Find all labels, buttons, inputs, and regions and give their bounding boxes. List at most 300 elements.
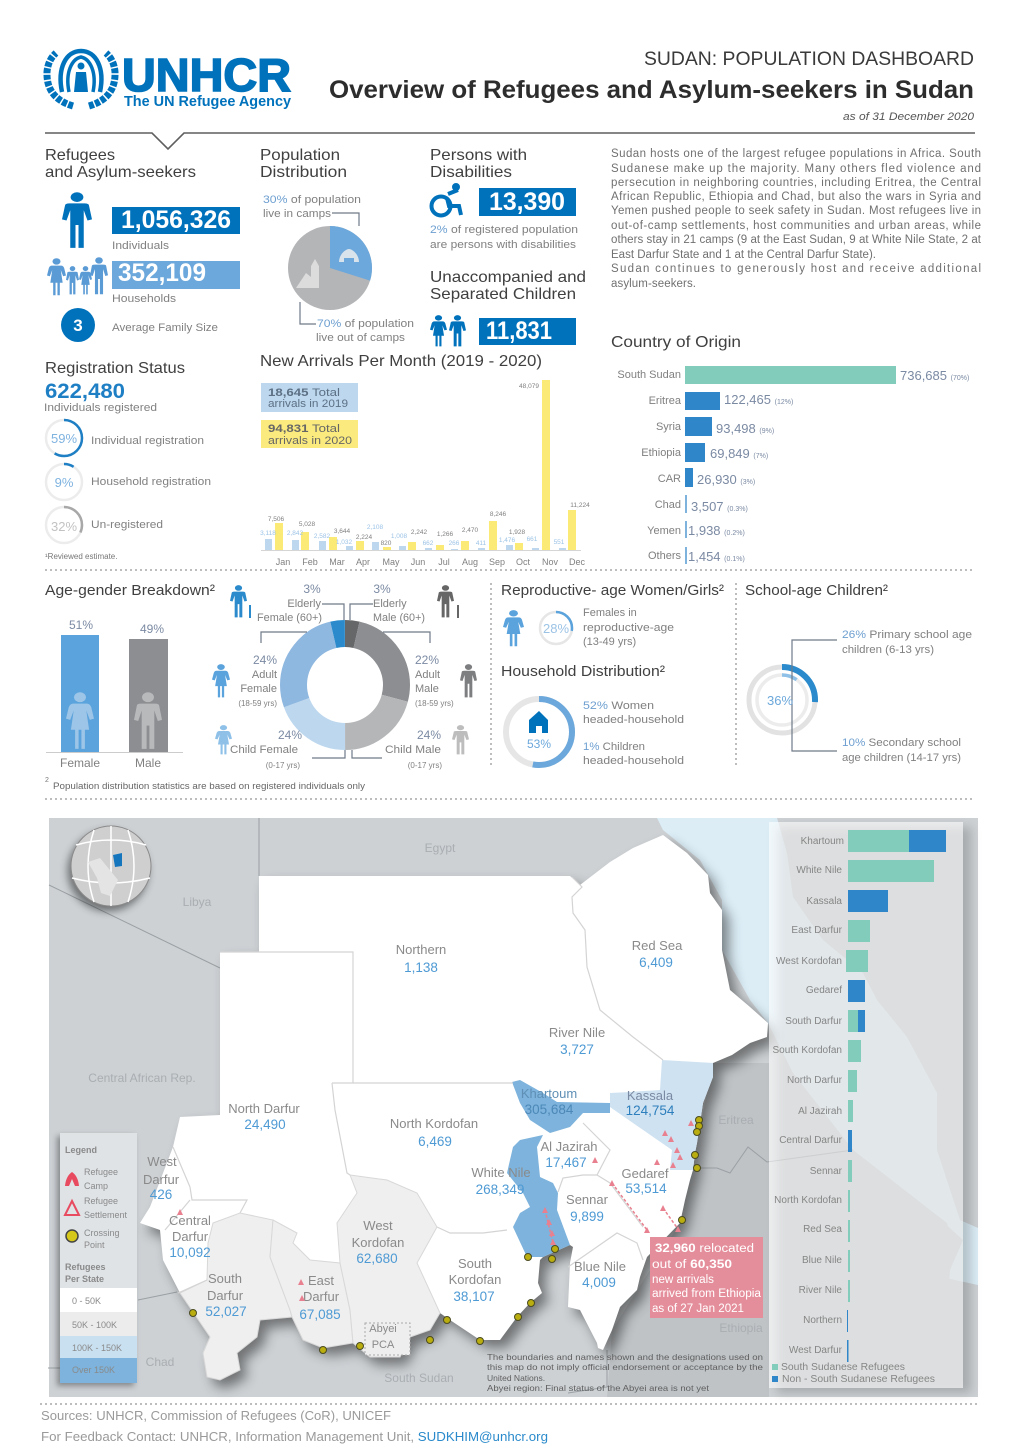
label: females in reproductive age: reproductive-age: [583, 622, 674, 634]
state labels: 62,680: [356, 1251, 398, 1266]
state labels: 6,469: [418, 1134, 452, 1149]
state labels: West: [147, 1154, 177, 1169]
legend item: crossing point: Crossing: [84, 1228, 120, 1238]
Sudan outline: [140, 835, 768, 1380]
callout: relocated new arrivals: [650, 1237, 763, 1318]
country labels: Central African Rep.: [88, 1071, 196, 1085]
state labels: South: [208, 1271, 242, 1286]
label: elderly male: Elderly: [373, 598, 407, 610]
state: White Nile: [507, 1135, 570, 1257]
heading: School-age Children²: [745, 582, 888, 599]
value labels: 2019: 661: [527, 536, 538, 543]
axis labels: months: Mar: [329, 557, 345, 567]
bar: South Sudan: South Sudan: [617, 369, 681, 381]
stat: individuals registered: [44, 380, 157, 414]
bar: Ethiopia: Ethiopia: [641, 447, 682, 459]
text block: overview paragraph: Yemen pushed people to seek safety in Sudan. Most refugees live in: [611, 205, 981, 217]
label: adult female: [212, 653, 277, 708]
panel: population distribution: [260, 147, 414, 344]
gauge: 28%: 28%: [543, 621, 569, 636]
chart legend: Non - South Sudanese Refugees: [782, 1374, 935, 1385]
bar: Syria: [656, 417, 774, 436]
bars: South Sudanese refugees: [846, 830, 934, 1302]
state labels: 17,467: [545, 1155, 587, 1170]
state labels: 305,684: [525, 1102, 574, 1117]
value labels: 2020: 5,028: [299, 521, 316, 528]
value labels: 2019: 551: [554, 539, 565, 546]
label: in camps: 30% of population: [263, 194, 354, 206]
stat: average family size: Average Family Size: [112, 322, 218, 334]
text block: overview paragraph: Sudan continues to generously host and receive additional: [611, 263, 981, 275]
state labels: 268,349: [476, 1182, 524, 1197]
label: elderly female: 3%: [303, 582, 321, 596]
sea: [657, 818, 978, 1397]
bar: male: [129, 622, 168, 770]
stat: average family size: [61, 308, 218, 342]
bar: South Sudan: [617, 366, 969, 384]
label: adult female: (18-59 yrs): [238, 699, 277, 708]
axis labels: months: Aug: [462, 557, 478, 567]
label: child male: 24%: [417, 728, 441, 742]
callout: 2019 total: 18,645 Total: [268, 387, 340, 399]
footnote: 2: [45, 777, 49, 784]
stat: households: 352,109: [118, 259, 206, 287]
gauge: individual registration: [46, 420, 204, 456]
text block: overview paragraph: asylum-seekers.: [611, 278, 696, 290]
bar labels: states: Khartoum: [801, 836, 844, 847]
footnote: Population distribution statistics are based on registered individuals only: [53, 781, 366, 791]
bar: Ethiopia: [641, 443, 768, 462]
axis labels: months: Jan: [276, 557, 290, 567]
state labels: Khartoum: [521, 1086, 577, 1101]
panel: refugees and asylum-seekers: [45, 147, 240, 342]
value labels: 2019: 266: [449, 540, 460, 547]
state labels: Red Sea: [632, 938, 683, 953]
state labels: Kassala: [627, 1088, 674, 1103]
bar: Ethiopia: 69,849 (7%): [710, 446, 768, 461]
label: adult male: (18-59 yrs): [415, 699, 454, 708]
gauge: household registration: 9%: [55, 475, 74, 490]
text block: overview paragraph: African Republic, Ethiopia and Chad, but also the wars in Syria and: [611, 191, 981, 203]
stat: individuals registered: Individuals registered: [44, 402, 157, 414]
title block: [329, 49, 975, 123]
state labels: [143, 938, 683, 1351]
donut chart: [294, 634, 396, 736]
label: adult female: 24%: [253, 653, 277, 667]
value labels: 2020: 1,928: [509, 529, 526, 536]
stat: average family size: 3: [73, 316, 83, 335]
icon: UNHCR emblem: [47, 51, 115, 106]
heading: Registration Status: [45, 360, 185, 377]
label: child female: (0-17 yrs): [266, 761, 300, 770]
icon: house: [529, 711, 548, 733]
state labels: 4,009: [582, 1275, 616, 1290]
bar labels: states: River Nile: [799, 1285, 842, 1296]
country labels: South Sudan: [384, 1371, 454, 1385]
crossing points: [190, 1116, 702, 1354]
legend item: crossing point: Point: [84, 1240, 105, 1250]
text block: overview paragraph: others stay in 21 camps (9 at the East Sudan, 9 at White Nile State, 2 at: [611, 234, 982, 246]
callout: relocated new arrivals: as of 27 Jan 2021: [652, 1303, 744, 1315]
state labels: 24,490: [244, 1117, 286, 1132]
legend swatch: 100K - 150K: 100K - 150K: [72, 1343, 122, 1353]
value labels: 2019: 1,476: [499, 537, 516, 544]
bar labels: states: Red Sea: [803, 1224, 842, 1235]
legend item: refugee camp: Refugee: [84, 1167, 118, 1177]
bar: Syria: 93,498 (9%): [716, 421, 774, 436]
state labels: 38,107: [453, 1289, 495, 1304]
state labels: Al Jazirah: [540, 1139, 598, 1154]
chart: new arrivals per month: [260, 353, 590, 567]
state labels: Sennar: [566, 1192, 609, 1207]
axis labels: months: Feb: [302, 557, 318, 567]
value labels: 2019: 2,842: [287, 530, 304, 537]
bar: Syria: Syria: [656, 421, 682, 433]
state: South Darfur: [180, 1213, 292, 1380]
value labels: 2020: 1,266: [437, 531, 454, 538]
heading: Age-gender Breakdown²: [45, 582, 215, 599]
bar labels: states: South Kordofan: [772, 1045, 842, 1056]
state labels: East: [308, 1273, 334, 1288]
icon: children: [430, 315, 466, 346]
legend heading: refugees per state: Per State: [65, 1274, 104, 1284]
gauge: school-age: 36%: [767, 693, 793, 708]
country labels: Egypt: [425, 841, 456, 855]
pie chart: [288, 226, 372, 310]
value labels: 2020: 2,224: [356, 534, 373, 541]
state borders: [165, 877, 663, 1293]
label: elderly male: [373, 582, 458, 624]
callout: 2020 total: [261, 420, 358, 448]
axis labels: months: Nov: [542, 557, 558, 567]
state labels: PCA: [372, 1339, 395, 1351]
bar: Others: [648, 547, 745, 564]
stat: 11,831: 11,831: [486, 317, 552, 345]
state labels: Blue Nile: [574, 1259, 626, 1274]
gauge: household registration: Household registration: [91, 476, 211, 488]
state: West Kordofan: [337, 1175, 440, 1357]
bar: female: Female: [60, 756, 100, 770]
heading: Country of Origin: [611, 334, 741, 351]
stat: individuals: [112, 206, 240, 252]
value labels: 2020: 3,644: [334, 528, 351, 535]
state labels: 53,514: [625, 1181, 667, 1196]
value labels: 2019: 411: [476, 540, 487, 547]
panel: persons with disabilities: [430, 147, 578, 251]
axis labels: months: Apr: [356, 557, 370, 567]
chart legend: [772, 1362, 935, 1385]
bar labels: states: West Darfur: [789, 1345, 843, 1356]
feedback contact: For Feedback Contact: UNHCR, Information Management Unit, SUDKHIM@unhcr.org: [41, 1429, 548, 1444]
gauge: school-age: [749, 640, 837, 751]
legend: [60, 1133, 137, 1383]
callout: relocated new arrivals: new arrivals: [652, 1274, 714, 1286]
country labels: Chad: [146, 1355, 174, 1369]
bar labels: states: North Kordofan: [774, 1195, 842, 1206]
surrounding land: Eritrea and Ethiopia, west of panel edge: [607, 1063, 769, 1397]
legend swatch: 0 - 50K: 0 - 50K: [72, 1296, 101, 1306]
callout: 2019 total: [261, 383, 358, 412]
state: East Darfur: [270, 1220, 353, 1348]
panel: unaccompanied and separated children: [430, 269, 586, 346]
label: child female: [215, 725, 302, 770]
callout: 2020 total: arrivals in 2020: [268, 435, 352, 447]
bar labels: states: Blue Nile: [802, 1255, 842, 1266]
callout: relocated new arrivals: 32,960 relocated: [655, 1243, 746, 1255]
heading: Population: [260, 147, 340, 164]
bar labels: states: East Darfur: [791, 925, 843, 936]
sources and contact: [41, 1408, 548, 1444]
panel: refugees per state bar chart: [769, 822, 963, 1388]
heading: Unaccompanied and: [430, 269, 586, 286]
bar: CAR: [658, 468, 755, 487]
surrounding land: Eritrea and Ethiopia, east of panel edge: [769, 1063, 978, 1397]
bar: Chad: 3,507 (0.3%): [691, 499, 748, 514]
state labels: Darfur: [303, 1289, 340, 1304]
panel: age-gender breakdown: [45, 582, 477, 791]
bar labels: states: Sennar: [810, 1166, 843, 1177]
label: child female: Child Female: [230, 744, 298, 756]
gauge: 28%: [540, 612, 572, 644]
supertitle: SUDAN: POPULATION DASHBOARD: [644, 49, 974, 70]
value labels: 2020: 7,506: [268, 516, 285, 523]
bar: CAR: 26,930 (3%): [697, 472, 755, 487]
stat: households: [112, 259, 240, 305]
bar: South Sudan: 736,685 (70%): [900, 368, 969, 383]
state labels: Central: [169, 1213, 211, 1228]
bar: Chad: [655, 495, 748, 514]
icon: wheelchair: [432, 185, 461, 216]
state labels: 1,138: [404, 960, 438, 975]
callout: 2019 total: arrivals in 2019: [268, 398, 348, 410]
sources: Sources: UNHCR, Commission of Refugees (CoR), UNICEF: [41, 1408, 391, 1423]
bar: Chad: Chad: [655, 499, 681, 511]
label: adult male: [415, 653, 477, 708]
disclaimer: Abyei region: Final status of the Abyei area is not yet: [487, 1383, 710, 1393]
value labels: 2020: 48,079: [519, 383, 539, 390]
wordmark: UNHCR: UNHCR: [122, 49, 291, 101]
main title: Overview of Refugees and Asylum-seekers in Sudan: [329, 76, 974, 104]
state labels: North Kordofan: [390, 1116, 478, 1131]
label: females in reproductive age: (13-49 yrs): [583, 636, 636, 648]
state labels: 3,727: [560, 1042, 594, 1057]
heading: Separated Children: [430, 286, 576, 303]
heading: Persons with: [430, 147, 527, 164]
text block: overview paragraph: Sudanese make up the majority. Many others fled violence and: [611, 163, 981, 175]
value labels: 2019: 662: [423, 540, 434, 547]
heading: New Arrivals Per Month (2019 - 2020): [260, 353, 542, 370]
bar labels: states: West Kordofan: [776, 956, 842, 967]
label: adult male: 22%: [415, 653, 439, 667]
gauge: un-registered: 32%: [51, 519, 77, 534]
bar: female: 51%: [69, 618, 93, 632]
panel: school-age children: [745, 582, 972, 764]
state labels: River Nile: [549, 1025, 605, 1040]
bar labels: states: Kassala: [806, 896, 842, 907]
chart: country of origin: [611, 334, 969, 564]
heading: Disabilities: [430, 164, 512, 181]
label: child male: Child Male: [385, 744, 441, 756]
country labels: Libya: [183, 895, 212, 909]
map background: [49, 818, 978, 1397]
gauge: individual registration: 59%: [51, 431, 77, 446]
disclaimer: United Nations.: [487, 1373, 545, 1383]
panel: household distribution: [501, 663, 684, 767]
bar: Others: Others: [648, 550, 681, 562]
stat: households: Households: [112, 293, 177, 305]
label: adult female: Adult: [252, 669, 277, 681]
bar: Yemen: Yemen: [647, 525, 681, 537]
axis labels: months: Jun: [411, 557, 425, 567]
icon: family: [47, 257, 108, 295]
state labels: Gedaref: [622, 1166, 669, 1181]
state labels: Darfur: [207, 1288, 244, 1303]
heading: Distribution: [260, 164, 347, 181]
legend heading: Legend: [65, 1145, 97, 1155]
bars: Non-South Sudanese refugees: [847, 830, 946, 1362]
bar: female: [60, 618, 100, 770]
bar: Yemen: [647, 521, 745, 538]
country labels: Eritrea: [718, 1113, 754, 1127]
label: primary: children (6-13 yrs): [842, 644, 934, 656]
label: adult male: Adult: [415, 669, 440, 681]
state labels: 67,085: [299, 1307, 341, 1322]
label: elderly female: Elderly: [287, 598, 321, 610]
heading: Reproductive- age Women/Girls²: [501, 582, 724, 599]
label: in camps: live in camps: [263, 208, 332, 220]
bar: Eritrea: [649, 392, 793, 410]
legend item: refugee settlement: [65, 1196, 128, 1220]
axis labels: months: Oct: [516, 557, 530, 567]
label: elderly male: 3%: [373, 582, 391, 596]
label: women-headed: 52% Women: [583, 700, 649, 712]
label: elderly male: Male (60+): [373, 612, 425, 624]
text block: overview paragraph: East Darfur State and 1 at the Central Darfur State).: [611, 249, 876, 261]
value labels: 2020: 2,242: [411, 529, 428, 536]
value labels: 2019: 2,108: [367, 524, 384, 531]
bar: CAR: CAR: [658, 473, 681, 485]
state labels: West: [363, 1218, 393, 1233]
relocation routes: [545, 1183, 678, 1243]
legend heading: refugees per state: Refugees: [65, 1262, 106, 1272]
label: adult female: Female: [240, 683, 277, 695]
stat: 13,390: 13,390: [489, 188, 565, 216]
gauge: household registration: [46, 464, 211, 500]
legend swatch: 50K - 100K: [60, 1312, 137, 1336]
heading: Refugees: [45, 147, 115, 164]
label: child female: 24%: [278, 728, 302, 742]
callout: relocated new arrivals: arrived from Ethiopia: [652, 1288, 762, 1300]
bar: Eritrea: Eritrea: [649, 395, 682, 407]
text block: overview paragraph: persecution in neighboring countries, including Eritrea, the Central: [611, 177, 981, 189]
axis labels: months: Dec: [569, 557, 585, 567]
bar labels: states: Central Darfur: [779, 1135, 843, 1146]
label: disabilities share: are persons with disabilities: [430, 239, 577, 251]
bar: Others: 1,454 (0.1%): [688, 549, 745, 564]
heading: and Asylum-seekers: [45, 164, 196, 181]
legend item: refugee settlement: Refugee: [84, 1196, 118, 1206]
axis labels: months: Jul: [438, 557, 450, 567]
state: Abyei box: [365, 1323, 410, 1355]
state: Kassala: [610, 1060, 713, 1170]
label: child male: (0-17 yrs): [408, 761, 442, 770]
gauge: 53% women-headed: 53%: [527, 737, 551, 751]
bar: Yemen: 1,938 (0.2%): [688, 523, 745, 538]
label: secondary: age children (14-17 yrs): [842, 752, 961, 764]
state labels: Northern: [396, 942, 446, 957]
gauge: 53% women-headed: [506, 699, 572, 765]
label: out of camps: live out of camps: [316, 332, 406, 344]
bar labels: states: Northern: [803, 1315, 842, 1326]
state labels: Kordofan: [449, 1272, 501, 1287]
state labels: 124,754: [626, 1103, 675, 1118]
text block: overview paragraph: Sudan hosts one of the largest refugee populations in Africa. South: [611, 148, 981, 160]
text block: overview paragraph: out-of-camp settlements, host communities and urban areas, while: [611, 220, 981, 232]
value labels: 2020: 820: [381, 540, 392, 547]
value labels: 2019: 2,582: [314, 533, 331, 540]
bar: Eritrea: 122,465 (12%): [724, 392, 793, 407]
legend item: refugee camp: Camp: [84, 1181, 108, 1191]
label: females in reproductive age: Females in: [583, 607, 637, 619]
bars: 2019: [265, 539, 566, 550]
label: adult male: Male: [415, 683, 439, 695]
state labels: 9,899: [570, 1209, 604, 1224]
label: children-headed: 1% Children: [583, 741, 643, 753]
panel: reproductive-age women and girls: [501, 582, 724, 648]
label: child male: [385, 725, 469, 770]
value labels: 2019: 1,032: [336, 539, 353, 546]
legend item: crossing point: [66, 1228, 120, 1250]
map of Sudan: [48, 818, 978, 1397]
surrounding land: Arabian peninsula: [777, 818, 978, 1228]
label: out of camps: 70% of population: [317, 318, 407, 330]
value labels: 2019: 1,008: [391, 533, 408, 540]
inset globe: [71, 826, 151, 906]
legend swatch: Over 150K: [60, 1358, 137, 1383]
label: primary: 26% Primary school age: [842, 629, 963, 641]
disclaimer: The boundaries and names shown and the designations used on: [487, 1352, 763, 1362]
state labels: Darfur: [143, 1172, 180, 1187]
stat: individuals registered: 622,480: [45, 380, 125, 403]
bar labels: states: South Darfur: [785, 1016, 843, 1027]
gauge: un-registered: Un-registered: [91, 519, 163, 531]
icon: person: [62, 192, 92, 248]
bars: 2020: [275, 380, 576, 550]
label: children-headed: headed-household: [583, 755, 684, 767]
state labels: Abyei: [369, 1323, 397, 1335]
date: as of 31 December 2020: [843, 111, 975, 123]
state labels: 426: [150, 1187, 172, 1202]
value labels: 2020: 2,470: [462, 527, 479, 534]
bar labels: states: White Nile: [796, 865, 842, 876]
heading: Household Distribution²: [501, 663, 665, 680]
bar labels: states: Gedaref: [806, 985, 842, 996]
state labels: Kordofan: [352, 1235, 404, 1250]
legend swatch: Over 150K: Over 150K: [72, 1365, 115, 1375]
axis labels: months: May: [382, 557, 400, 567]
legend item: refugee settlement: Settlement: [84, 1210, 128, 1220]
gauge: un-registered: [46, 507, 163, 543]
stat: individuals: 1,056,326: [121, 206, 231, 234]
label: secondary: 10% Secondary school: [842, 737, 956, 749]
label: disabilities share: 2% of registered population: [430, 224, 566, 236]
legend swatch: 100K - 150K: [60, 1336, 137, 1358]
label: women-headed: headed-household: [583, 714, 684, 726]
value labels: 2020: 8,246: [490, 511, 507, 518]
state labels: 6,409: [639, 955, 673, 970]
value labels: 2019: 3,118: [260, 530, 276, 537]
state labels: White Nile: [471, 1165, 531, 1180]
